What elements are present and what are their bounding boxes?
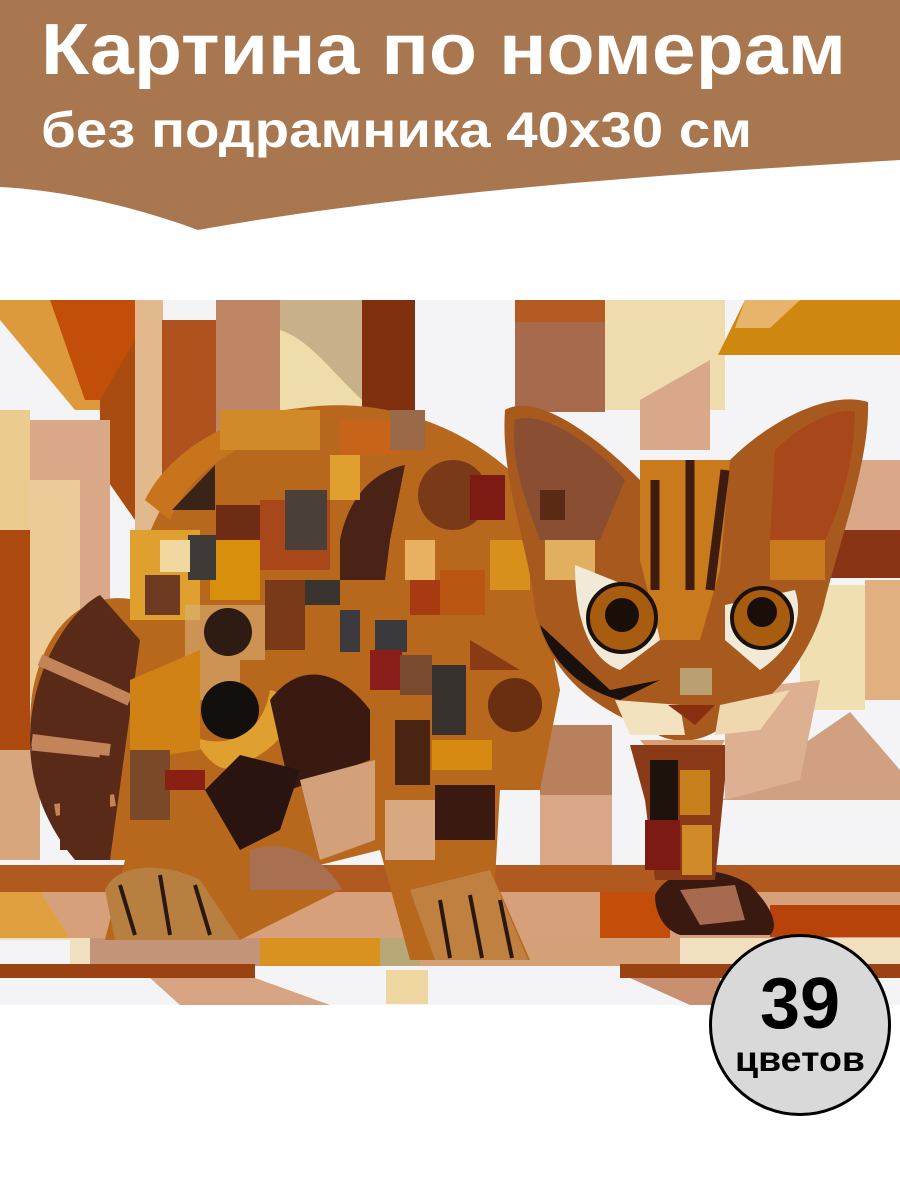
- subtitle: без подрамника 40х30 см: [41, 102, 752, 158]
- icon: right eye: [732, 588, 792, 648]
- header banner: [0, 0, 900, 230]
- cat head: [504, 399, 868, 765]
- badge number: 39: [760, 964, 840, 1044]
- painting background: [0, 300, 900, 1005]
- badge label: цветов: [735, 1040, 865, 1079]
- badge: 39 colours: [710, 936, 890, 1114]
- icon: left eye: [588, 584, 656, 652]
- painting: abstract cat: [0, 300, 900, 1005]
- cat front legs: [630, 745, 725, 880]
- painting floor bands: [0, 865, 900, 1005]
- cat body: [30, 405, 560, 960]
- title: Картина по номерам: [41, 10, 846, 90]
- cat paws: [105, 846, 774, 960]
